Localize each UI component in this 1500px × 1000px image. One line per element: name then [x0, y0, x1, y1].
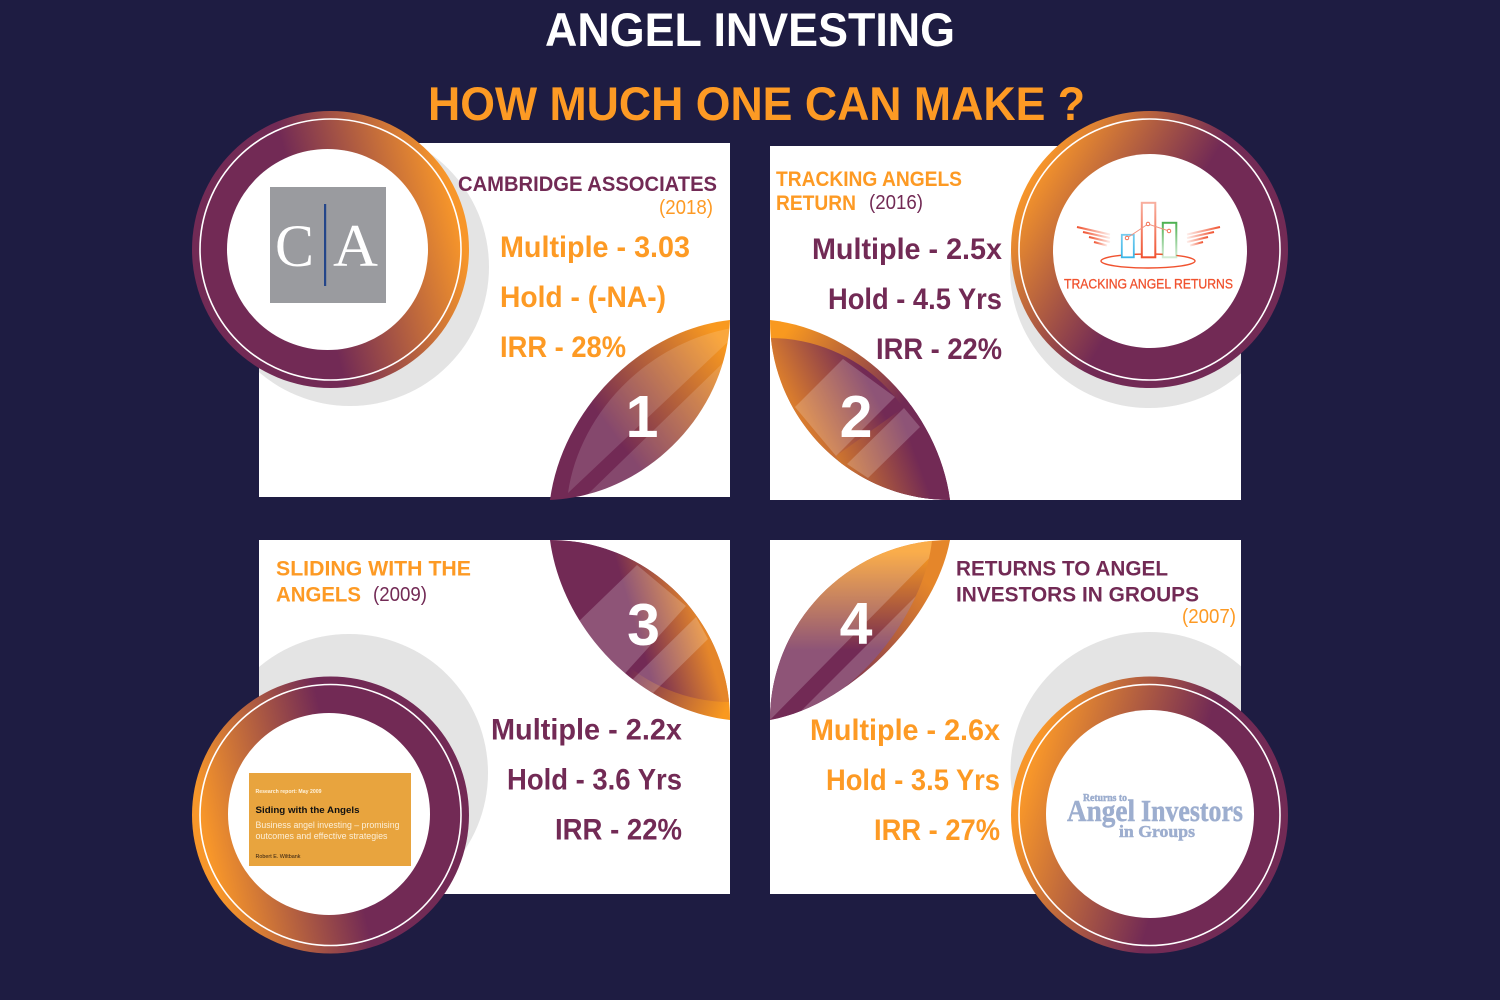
logo ring 3 [192, 676, 469, 954]
stats 3: IRR - 22% [555, 814, 682, 846]
leaf badge 2: 2 [840, 384, 872, 450]
logo: report cover [249, 773, 411, 866]
logo: report cover: Business angel investing – promising [256, 820, 400, 830]
panel 1: Cambridge Associates [192, 111, 760, 520]
logo: Tracking Angel Returns [1064, 203, 1233, 292]
logo: report cover: outcomes and effective strategies [256, 831, 388, 841]
stats 2: Hold - 4.5 Yrs [828, 283, 1002, 316]
leaf badge 1 [550, 320, 730, 500]
logo: CA: A [333, 213, 378, 279]
heading 4: INVESTORS IN GROUPS [956, 584, 1199, 606]
card background 3 [259, 540, 730, 894]
stats 2: IRR - 22% [876, 333, 1002, 366]
stats 1: Hold - (-NA-) [500, 281, 666, 314]
heading 2: TRACKING ANGELS [776, 168, 962, 191]
leaf badge 3: 3 [627, 592, 660, 658]
stats 2: Multiple - 2.5x [812, 233, 1002, 266]
ring shadow 3 [259, 634, 488, 850]
stats 3 [491, 714, 682, 846]
stats 4: Hold - 3.5 Yrs [826, 764, 1000, 797]
year 1: (2018) [659, 197, 713, 219]
year 4: (2007) [1182, 606, 1236, 628]
logo: CA: C [275, 213, 314, 279]
heading 3 [276, 558, 471, 606]
logo: Tracking Angel Returns: TRACKING ANGEL RETURNS [1064, 276, 1233, 292]
stats 4: IRR - 27% [874, 814, 1000, 847]
year 2: (2016) [869, 192, 923, 214]
stats 3: Hold - 3.6 Yrs [507, 764, 682, 796]
heading 2 [776, 168, 962, 215]
stats 2 [812, 233, 1002, 366]
stats 3: Multiple - 2.2x [491, 714, 682, 746]
stats 4: Multiple - 2.6x [810, 714, 1000, 747]
logo: report cover: Siding with the Angels [256, 805, 360, 816]
logo ring 2 [1011, 111, 1288, 388]
logo: report cover: Research report: May 2009 [256, 789, 322, 795]
logo: Angel Investors in Groups [1067, 793, 1243, 841]
stats 1 [500, 231, 690, 364]
title: ANGEL INVESTING [545, 4, 955, 57]
heading 1: CAMBRIDGE ASSOCIATES [458, 173, 717, 196]
card background 1 [259, 143, 730, 497]
card background 4 [770, 540, 1241, 894]
year 3: (2009) [373, 584, 427, 606]
logo: Angel Investors in Groups: in Groups [1119, 822, 1195, 841]
logo ring 1 [192, 111, 469, 388]
logo: Angel Investors in Groups: Investors [1141, 793, 1243, 828]
stats 4 [810, 714, 1000, 847]
card background 2 [770, 146, 1241, 500]
logo: CA [270, 187, 386, 303]
heading 3: ANGELS [276, 584, 361, 606]
leaf badge 4 [770, 540, 950, 720]
leaf badge 2 [770, 320, 950, 500]
subtitle: HOW MUCH ONE CAN MAKE ? [428, 78, 1085, 131]
logo: report cover: Robert E. Wiltbank [256, 854, 301, 860]
leaf badge 3 [550, 540, 730, 720]
leaf badge 4: 4 [840, 591, 873, 657]
stats 1: IRR - 28% [500, 331, 626, 364]
stats 1: Multiple - 3.03 [500, 231, 690, 264]
ring shadow 2 [1010, 254, 1241, 408]
heading 2: RETURN [776, 192, 856, 215]
heading 4: RETURNS TO ANGEL [956, 558, 1168, 580]
heading 4 [956, 558, 1199, 606]
panel 3: Sliding with the Angels [192, 540, 730, 954]
panel 4: Returns to Angel Investors in Groups [760, 530, 1288, 954]
logo ring 4 [1011, 676, 1288, 954]
heading 3: SLIDING WITH THE [276, 558, 471, 580]
ring shadow 1 [259, 154, 489, 406]
leaf badge 1: 1 [626, 384, 658, 450]
ring shadow 4 [1010, 632, 1241, 794]
logo: Angel Investors in Groups: Returns to [1083, 793, 1127, 804]
logo: Angel Investors in Groups: Angel [1067, 793, 1135, 828]
panel 2: Tracking Angels Return [770, 111, 1288, 500]
